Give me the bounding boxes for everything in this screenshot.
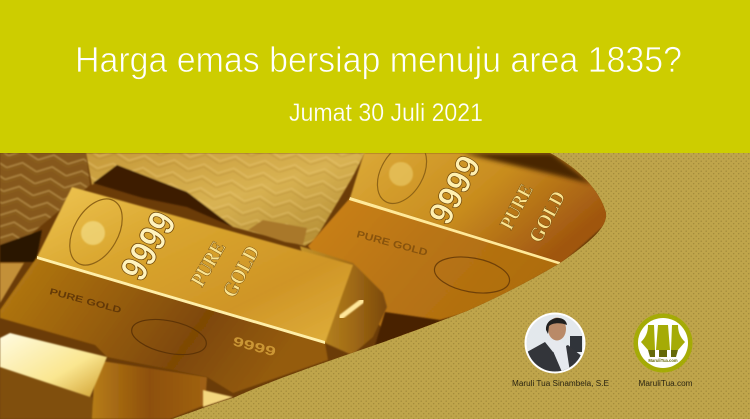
main bar oval stamp — [69, 198, 123, 266]
dotted gold background panel — [0, 153, 750, 419]
side block between bars — [300, 246, 387, 355]
title: Harga emas bersiap menuju area 1835? — [75, 39, 682, 80]
second bar pure gold: PURE — [496, 181, 538, 233]
main bar front numbers: 9999 — [231, 333, 278, 359]
second bar front stamp text: PURE GOLD — [355, 229, 429, 259]
header band — [0, 0, 750, 153]
second bar flower stamp — [389, 162, 413, 186]
main bar 9999: 9999 — [113, 205, 185, 288]
MaruliTua logo — [634, 314, 692, 372]
main bar bright edge — [37, 256, 325, 344]
lower highlight — [203, 390, 233, 407]
main bar front oval — [131, 318, 207, 356]
author portrait — [524, 312, 586, 375]
second bar pure gold — [499, 184, 564, 242]
main bar front stamp text: PURE GOLD — [48, 286, 123, 315]
author name: Maruli Tua Sinambela, S.E — [512, 379, 609, 388]
bright gold highlight, lower left — [0, 333, 107, 397]
MaruliTua logo: MaruliTua.com — [648, 358, 678, 363]
second bar bright edge — [349, 197, 561, 265]
main bar flower stamp — [81, 221, 105, 245]
main bar pure gold: GOLD — [217, 242, 264, 301]
second bar 9999: 9999 — [422, 149, 489, 231]
second gold bar — [308, 153, 606, 337]
logo caption: MaruliTua.com — [638, 379, 693, 388]
main bar front face — [0, 257, 328, 393]
photo: gold bars — [0, 134, 620, 419]
second bar front oval — [434, 256, 510, 294]
main bar pure gold — [190, 240, 258, 296]
second bar top face — [350, 153, 610, 263]
main gold bar — [0, 187, 353, 393]
second bar front face — [308, 198, 562, 345]
second bar pure gold: GOLD — [525, 187, 570, 246]
lower left gold bar — [0, 360, 207, 419]
dark chevron bar, upper left — [0, 153, 90, 303]
main bar top face — [37, 187, 353, 343]
date subtitle: Jumat 30 Juli 2021 — [289, 99, 483, 127]
light chevron block, upper middle — [86, 153, 365, 246]
second bar oval stamp — [376, 153, 428, 204]
main bar pure gold: PURE — [186, 237, 230, 290]
